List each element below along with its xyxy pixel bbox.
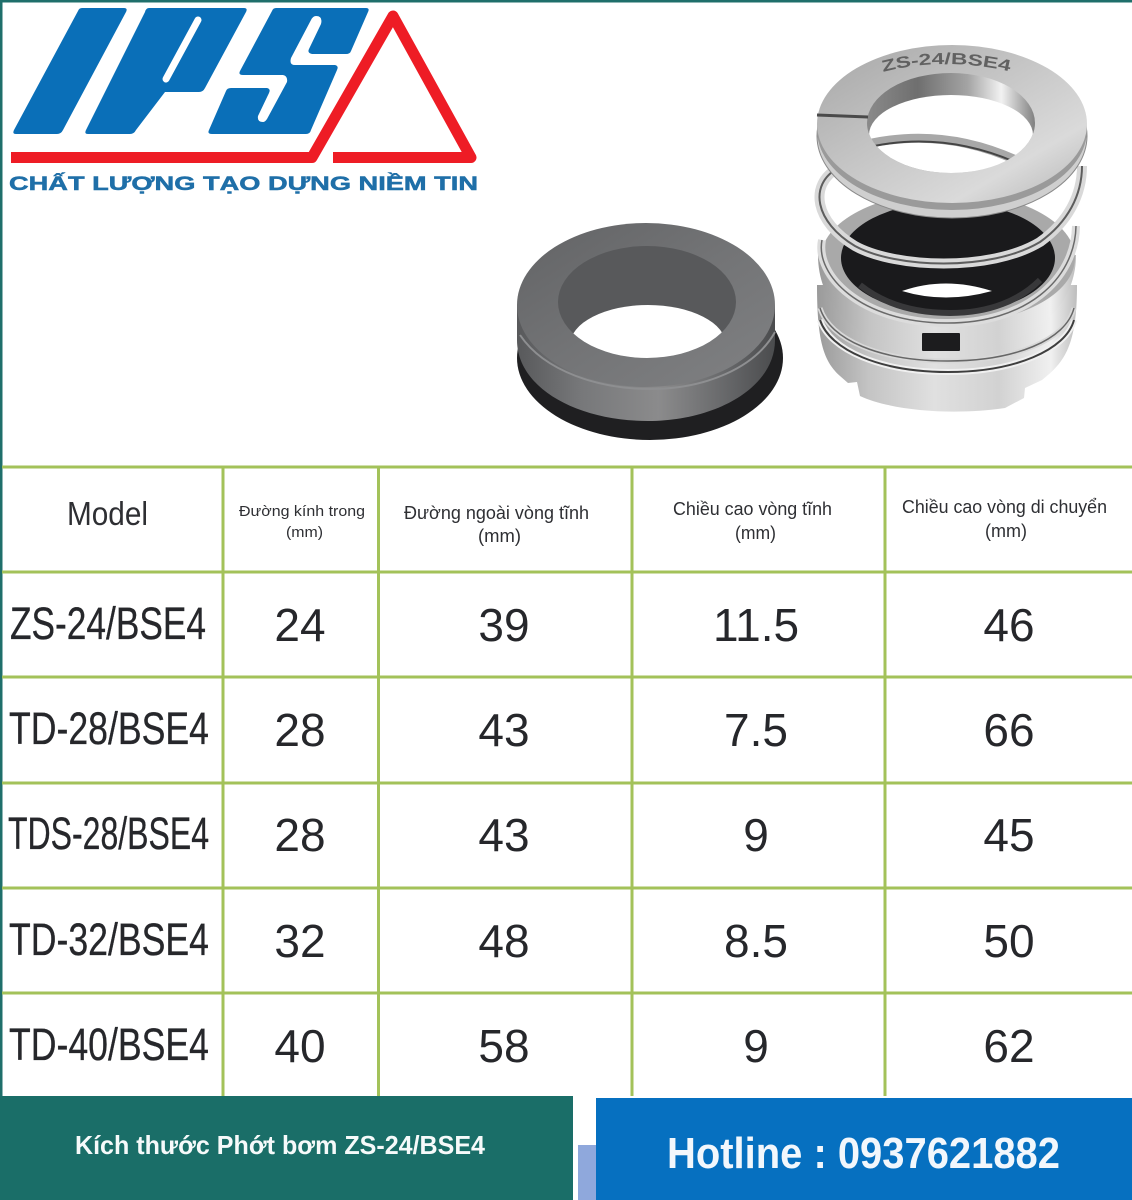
- row TD-32/BSE4: 48: [478, 915, 530, 967]
- ring bore opening: [869, 95, 1033, 175]
- header: stationary ring outer: (mm): [478, 526, 521, 546]
- lower spring coils: [820, 308, 1074, 372]
- header: stationary ring outer: [404, 503, 589, 546]
- row ZS-24/BSE4: 39: [478, 599, 530, 651]
- ceramic ring side: [517, 305, 775, 421]
- logo triangle swoosh: [11, 16, 471, 158]
- specification table: [2, 467, 1132, 1096]
- row TDS-28/BSE4: TDS-28/BSE4: [8, 808, 209, 859]
- row ZS-24/BSE4: [10, 598, 1035, 651]
- row TD-28/BSE4: [9, 703, 1035, 756]
- row TD-32/BSE4: 32: [274, 915, 326, 967]
- header: stationary ring height: Chiều cao vòng tĩnh: [673, 499, 832, 519]
- engraved model: ZS-24/BSE4: [882, 52, 1010, 72]
- row TDS-28/BSE4: 28: [274, 809, 326, 861]
- spring visible through bore: [872, 138, 1016, 162]
- hole through bellows: [902, 284, 992, 298]
- row TD-28/BSE4: 43: [478, 704, 530, 756]
- row TDS-28/BSE4: 43: [478, 809, 530, 861]
- ring split: [817, 115, 868, 117]
- row TD-28/BSE4: 66: [983, 704, 1035, 756]
- row TDS-28/BSE4: 9: [743, 809, 769, 861]
- header: inner diameter: [239, 503, 365, 541]
- row TD-32/BSE4: 8.5: [724, 915, 788, 967]
- row TD-32/BSE4: TD-32/BSE4: [9, 914, 209, 965]
- logo letter P: [85, 8, 247, 134]
- black rubber bellows: [841, 202, 1055, 314]
- logo: IPS: [9, 8, 478, 195]
- top ring rim: [817, 54, 1087, 218]
- row TD-28/BSE4: 7.5: [724, 704, 788, 756]
- row TD-32/BSE4: [9, 914, 1035, 967]
- row TDS-28/BSE4: [8, 808, 1035, 861]
- product photo: spring seal assembly: [814, 45, 1088, 412]
- base collar: [817, 285, 1077, 412]
- header: stationary ring height: [673, 499, 832, 543]
- ring bore wall: [867, 73, 1035, 173]
- hotline text: Hotline : 0937621882: [667, 1129, 1060, 1178]
- header: moving ring height: [902, 497, 1107, 541]
- collar coil front: [821, 226, 1076, 323]
- logo letter I: [13, 8, 127, 134]
- footer separator block: [578, 1145, 596, 1200]
- row TDS-28/BSE4: 45: [983, 809, 1035, 861]
- row ZS-24/BSE4: 11.5: [713, 599, 799, 651]
- header: stationary ring height: (mm): [735, 523, 776, 543]
- row TD-40/BSE4: TD-40/BSE4: [9, 1019, 209, 1070]
- ceramic ring top face: [517, 223, 775, 387]
- row TD-28/BSE4: TD-28/BSE4: [9, 703, 209, 754]
- row ZS-24/BSE4: 24: [274, 599, 326, 651]
- row TD-28/BSE4: 28: [274, 704, 326, 756]
- window slot: [922, 333, 960, 351]
- chamfer highlight: [520, 332, 775, 389]
- table header row: [67, 495, 1107, 546]
- row ZS-24/BSE4: ZS-24/BSE4: [10, 598, 206, 649]
- top ring face: [817, 45, 1087, 203]
- header: stationary ring outer: Đường ngoài vòng tĩnh: [404, 503, 589, 523]
- footer: hotline bar: [596, 1098, 1132, 1200]
- rubber o-ring: [517, 276, 783, 440]
- logo letter S: [208, 8, 369, 134]
- table grid: [2, 467, 1132, 1096]
- through hole: [573, 305, 722, 358]
- row TD-40/BSE4: 58: [478, 1020, 530, 1072]
- row TD-32/BSE4: 50: [983, 915, 1035, 967]
- row ZS-24/BSE4: 46: [983, 599, 1035, 651]
- row TD-40/BSE4: 40: [274, 1020, 326, 1072]
- bellows lower lip: [860, 280, 1040, 313]
- ring inner wall: [558, 246, 736, 358]
- header: moving ring height: Chiều cao vòng di chuyển: [902, 497, 1107, 517]
- row TD-40/BSE4: [9, 1019, 1035, 1072]
- header: model: Model: [67, 495, 148, 532]
- footer: title bar: [0, 1096, 573, 1200]
- logo slogan: CHẤT LƯỢNG TẠO DỰNG NIỀM TIN: [9, 173, 478, 195]
- metal sleeve: [818, 255, 1076, 354]
- upper spring coil: [819, 166, 1082, 264]
- header: inner diameter: Đường kính trong: [239, 503, 365, 520]
- collar ring: [821, 192, 1075, 324]
- header: inner diameter: (mm): [286, 524, 323, 541]
- row TD-40/BSE4: 9: [743, 1020, 769, 1072]
- footer title text: Kích thước Phớt bơm ZS-24/BSE4: [75, 1130, 486, 1160]
- product photo: stationary ceramic ring: [517, 223, 783, 440]
- row TD-40/BSE4: 62: [983, 1020, 1035, 1072]
- header: moving ring height: (mm): [985, 521, 1027, 541]
